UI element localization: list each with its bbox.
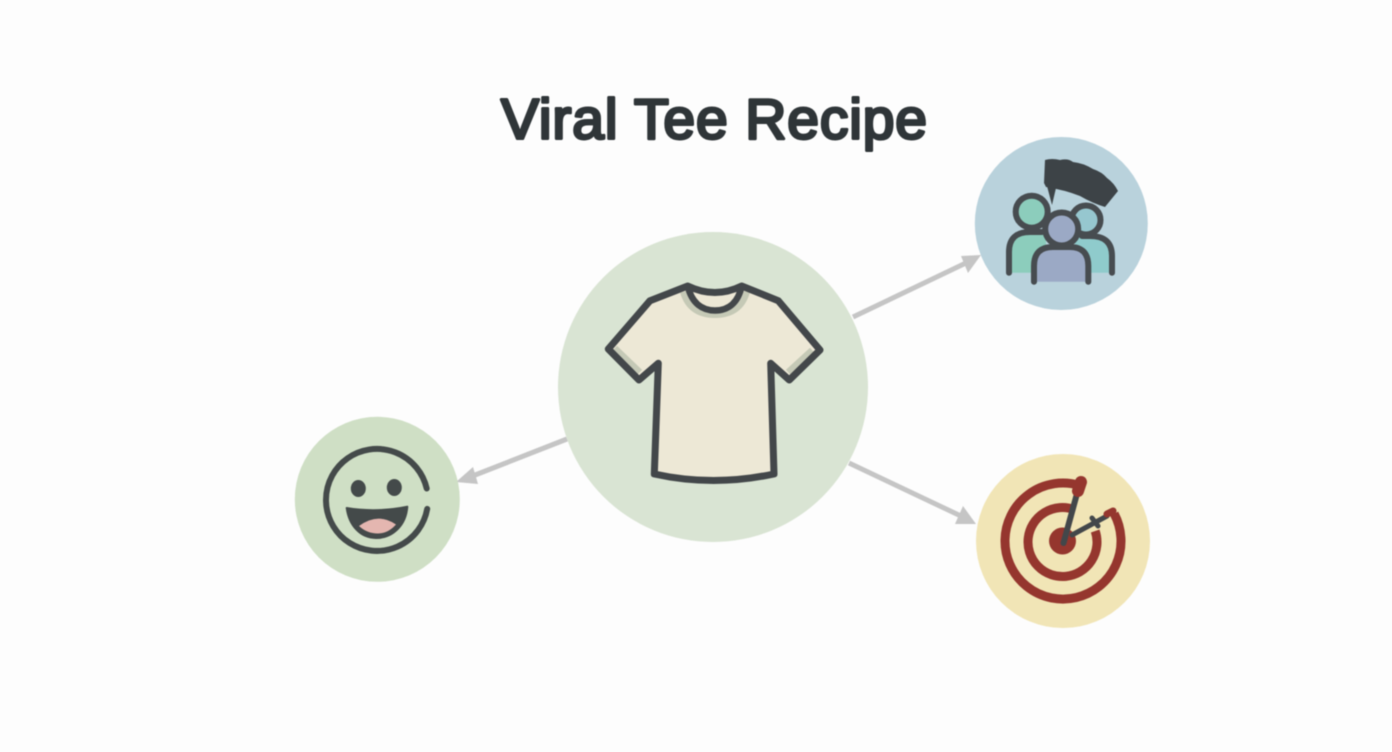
icon: person right <box>1072 206 1112 273</box>
panel: target circle <box>976 454 1150 628</box>
panel: central tee circle <box>558 232 868 542</box>
arrow: tee to community <box>853 255 981 317</box>
icon: darts <box>1064 482 1113 543</box>
panel: emotion circle <box>295 417 460 582</box>
icon: person centre <box>1034 212 1088 282</box>
arrow: tee to emotion <box>456 439 567 484</box>
arrow: tee to target <box>849 463 976 524</box>
icon: target rings <box>1005 483 1121 599</box>
icon: t-shirt <box>608 286 820 480</box>
icon: smiley face <box>326 449 427 551</box>
title: Viral Tee Recipe <box>501 88 927 152</box>
icon: person left <box>1009 196 1048 273</box>
icon: speech banner <box>1044 159 1118 207</box>
panel: community circle <box>975 137 1148 310</box>
